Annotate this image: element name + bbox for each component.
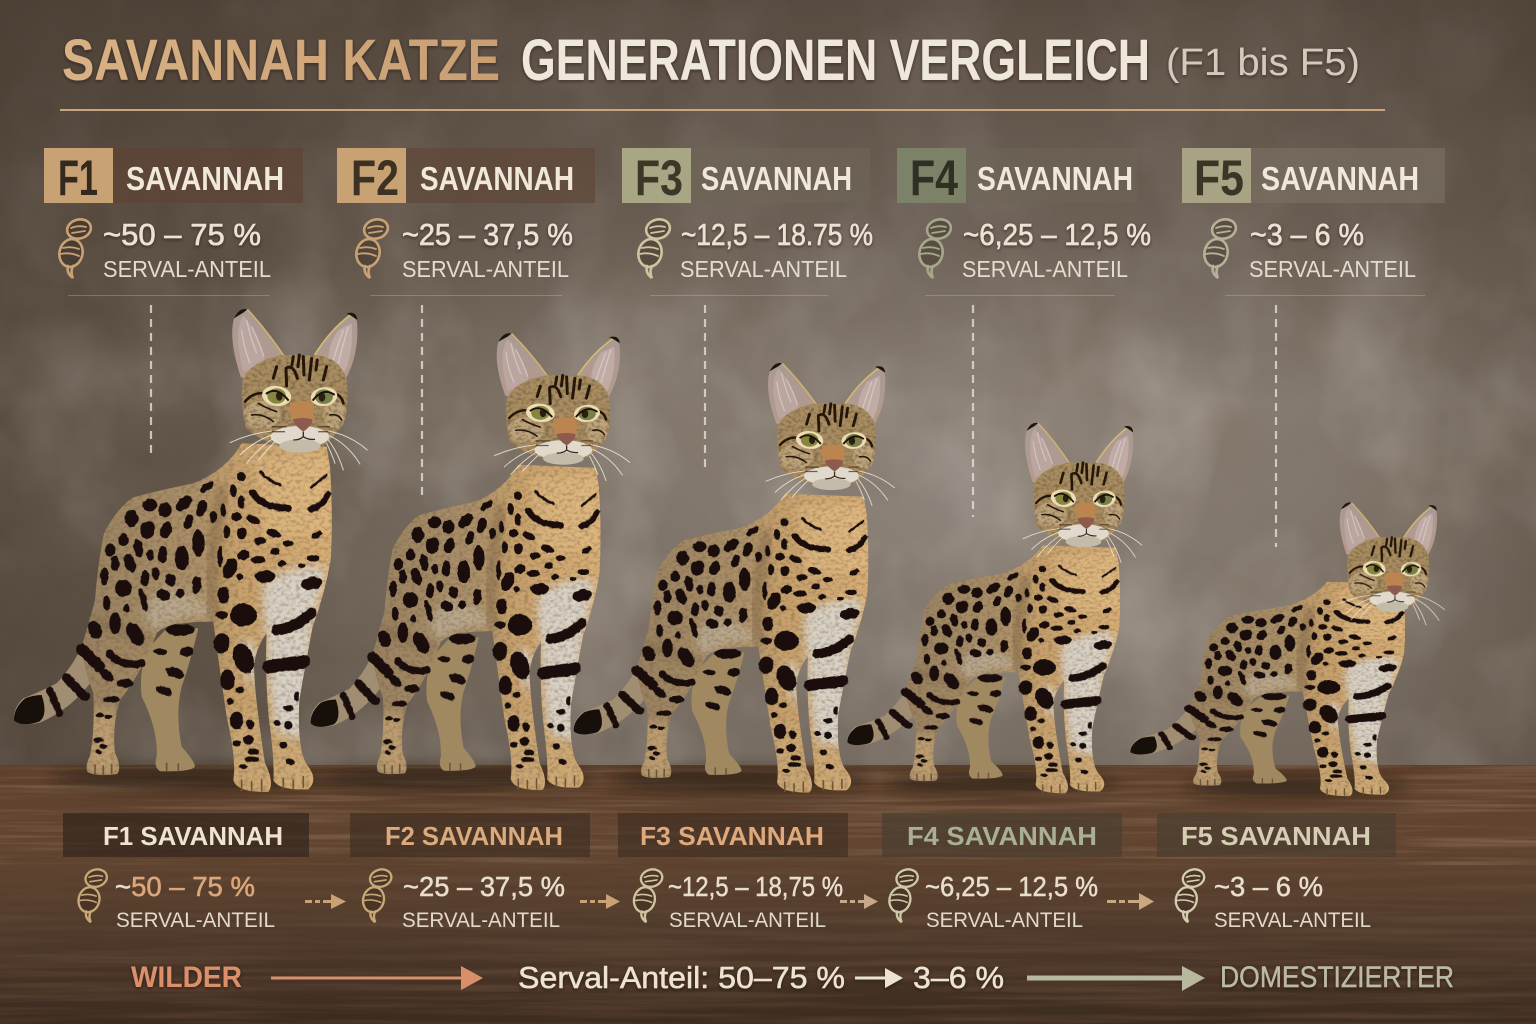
stat: F3 serval share: ~12,5 – 18.75 % bbox=[681, 217, 873, 252]
panel: F4 top header: SAVANNAH bbox=[977, 160, 1133, 197]
stat: F5 serval share: ~3 – 6 % bbox=[1250, 217, 1364, 252]
stat: F4 bottom serval share: ~6,25 – 12,5 % bbox=[925, 871, 1098, 902]
panel: F1 bottom label bbox=[63, 813, 309, 857]
panel: F5 bottom label bbox=[1157, 813, 1396, 857]
panel: F4 top header bbox=[897, 148, 1137, 206]
stat: F1 serval share: ~50 – 75 % bbox=[103, 217, 261, 252]
arrow: F2 to F3 bbox=[580, 894, 620, 909]
title: (F1 bis F5) bbox=[1166, 42, 1360, 84]
stat: F3 bottom serval share bbox=[631, 867, 843, 932]
stat: F1 bottom serval share bbox=[76, 867, 275, 932]
stat: F4 serval share bbox=[916, 217, 1151, 296]
panel: F3 bottom label bbox=[618, 813, 848, 857]
panel: F5 top header: SAVANNAH bbox=[1261, 160, 1419, 197]
stat: F5 serval share: SERVAL-ANTEIL bbox=[1249, 256, 1416, 282]
stat: F1 bottom serval share: SERVAL-ANTEIL bbox=[116, 909, 275, 932]
background: wooden floor bbox=[0, 765, 1536, 1024]
stat: F2 serval share bbox=[353, 217, 573, 296]
stat: F2 bottom serval share: ~25 – 37,5 % bbox=[403, 871, 565, 902]
panel: F5 top header: F5 bbox=[1194, 150, 1244, 206]
stat: F1 serval share: SERVAL-ANTEIL bbox=[103, 256, 271, 282]
stat: F5 bottom serval share: SERVAL-ANTEIL bbox=[1214, 909, 1371, 932]
bottom legend: serval summary: Serval-Anteil: 50–75 % bbox=[518, 960, 845, 995]
cat: F1 savannah bbox=[14, 309, 367, 797]
stat: F3 bottom serval share: ~12,5 – 18,75 % bbox=[668, 871, 843, 902]
panel: F1 top header bbox=[44, 148, 303, 206]
panel: F2 top header bbox=[337, 148, 595, 206]
panel: F1 top header: F1 bbox=[58, 150, 98, 206]
arrow: domestic direction bbox=[1027, 966, 1205, 991]
arrow: F3 to F4 bbox=[840, 894, 878, 909]
bottom legend: wilder label: WILDER bbox=[131, 961, 242, 994]
panel: F1 top header: SAVANNAH bbox=[126, 160, 284, 197]
stat: F4 bottom serval share bbox=[887, 867, 1098, 932]
stat: F3 serval share: SERVAL-ANTEIL bbox=[680, 256, 847, 282]
cat: F2 savannah bbox=[311, 333, 630, 794]
bottom legend: serval summary: 3–6 % bbox=[913, 960, 1004, 995]
panel: F1 bottom label: F1 SAVANNAH bbox=[103, 821, 283, 851]
stat: F5 bottom serval share bbox=[1173, 867, 1371, 932]
stat: F4 serval share: ~6,25 – 12,5 % bbox=[963, 217, 1151, 252]
stat: F5 serval share bbox=[1201, 217, 1425, 296]
panel: F5 top header bbox=[1182, 148, 1445, 206]
cat: F5 savannah bbox=[1130, 502, 1445, 799]
panel: F4 bottom label bbox=[882, 813, 1122, 857]
stat: F2 serval share: SERVAL-ANTEIL bbox=[402, 256, 569, 282]
stat: F1 bottom serval share: ~50 – 75 % bbox=[115, 871, 255, 902]
stat: F3 serval share bbox=[635, 217, 873, 296]
background: mottled studio wall bbox=[0, 0, 1536, 800]
title bbox=[62, 28, 1360, 93]
arrow: wilder direction bbox=[271, 966, 483, 990]
stat: F2 serval share: ~25 – 37,5 % bbox=[402, 217, 573, 252]
panel: F3 top header bbox=[622, 148, 870, 206]
panel: F4 top header: F4 bbox=[910, 150, 958, 206]
panel: F2 bottom label: F2 SAVANNAH bbox=[385, 821, 563, 851]
cat: F4 savannah bbox=[847, 423, 1142, 797]
panel: F3 top header: SAVANNAH bbox=[701, 160, 852, 197]
arrow: F4 to F5 bbox=[1107, 893, 1154, 910]
panel: F2 bottom label bbox=[350, 813, 590, 857]
stat: F5 bottom serval share: ~3 – 6 % bbox=[1214, 871, 1323, 902]
stat: F4 bottom serval share: SERVAL-ANTEIL bbox=[926, 909, 1083, 932]
title: SAVANNAH KATZE bbox=[62, 28, 500, 93]
panel: F3 top header: F3 bbox=[635, 150, 683, 206]
floor shadows under cats bbox=[50, 766, 1405, 796]
panel: F4 bottom label: F4 SAVANNAH bbox=[907, 821, 1097, 851]
stat: F4 serval share: SERVAL-ANTEIL bbox=[962, 256, 1128, 282]
stat: F2 bottom serval share bbox=[360, 867, 565, 932]
stat: F1 serval share bbox=[56, 217, 271, 296]
panel: F3 bottom label: F3 SAVANNAH bbox=[640, 821, 824, 851]
title: GENERATIONEN VERGLEICH bbox=[521, 28, 1150, 93]
panel: F2 top header: SAVANNAH bbox=[420, 160, 574, 197]
bottom legend: domestizierter label: DOMESTIZIERTER bbox=[1220, 961, 1454, 994]
cat: F3 savannah bbox=[574, 363, 894, 797]
panel: F2 top header: F2 bbox=[351, 150, 399, 206]
stat: F2 bottom serval share: SERVAL-ANTEIL bbox=[402, 909, 560, 932]
arrow: F1 to F2 bbox=[305, 894, 346, 909]
panel: F5 bottom label: F5 SAVANNAH bbox=[1181, 821, 1371, 851]
stat: F3 bottom serval share: SERVAL-ANTEIL bbox=[669, 909, 826, 932]
bottom legend: serval summary bbox=[518, 960, 1004, 995]
